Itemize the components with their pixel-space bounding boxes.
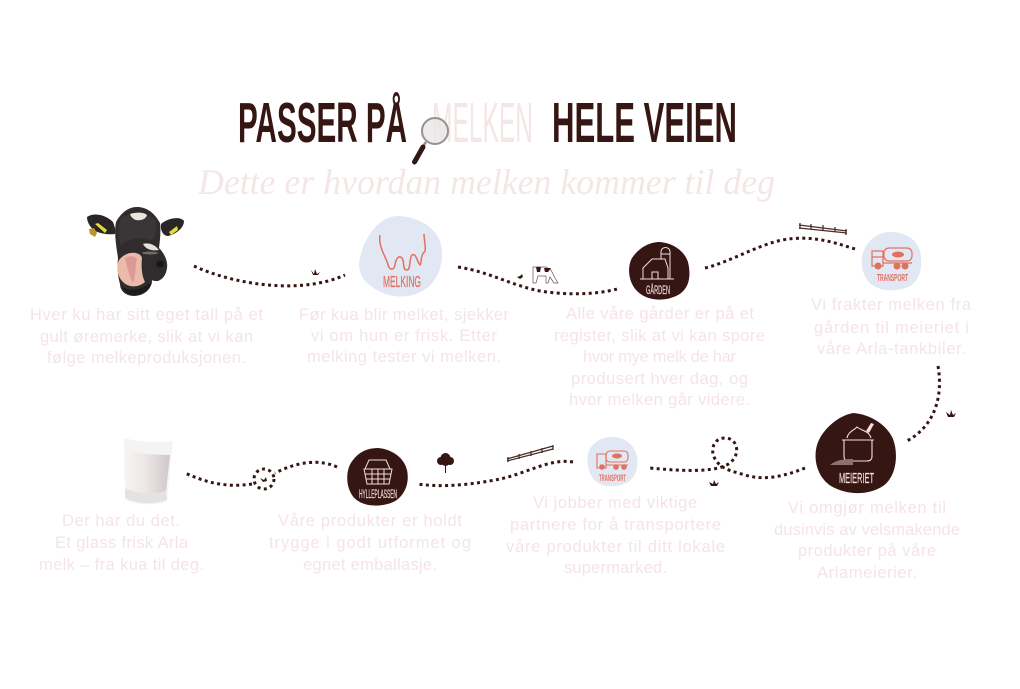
panel: transport icon 2: TRANSPORT [599,473,626,483]
text block: meieriet: dusinvis av velsmakende [774,521,960,539]
arrow: transport to shelf [418,461,573,486]
text block: gården: produsert hver dag, og [571,370,748,388]
text block: glass of milk: Der har du det. [62,512,180,530]
text block: meieriet: Arlameierier. [817,564,917,582]
text block: meieriet: Vi omgjør melken til [788,499,946,517]
text block: gården: hvor melken går videre. [569,391,750,409]
title: HELE VEIEN [552,91,737,155]
text block: transport to stores [506,494,725,577]
text block: gården [554,305,765,409]
text block: transport: Vi frakter melken fra [811,296,972,314]
text block: melking: melking tester vi melken. [307,348,501,366]
icon: shopping basket [364,460,392,484]
icon: yoghurt pot [842,427,874,461]
text block: hylleplassen: egnet emballasje. [303,556,437,574]
text block: hylleplassen: Våre produkter er holdt [278,512,462,530]
text block: gården: hvor mye melk de har [583,348,736,366]
icon: udder [380,234,425,270]
text block: transport to stores: våre produkter til ditt lokale [506,538,725,556]
panel: gården icon [629,242,689,300]
text block: meieriet [774,499,960,582]
panel: transport icon 2 [587,437,637,486]
panel: transport icon [862,232,921,290]
text block: transport to stores: partnere for å transportere [510,516,721,534]
arrow: farm to transport [705,238,855,268]
photo: glass of milk [124,438,173,504]
icon: grass tuft [260,477,267,482]
arrow: milking to farm [458,267,617,294]
icon: cow grazing [533,267,558,283]
text block: cow: Hver ku har sitt eget tall på et [30,306,263,324]
subtitle: Dette er hvordan melken kommer til deg [197,162,775,202]
text block: glass of milk [39,512,204,574]
text block: cow: gult øremerke, slik at vi kan [40,328,253,346]
text block: melking: vi om hun er frisk. Etter [311,327,498,345]
panel: hylleplassen icon [347,448,408,506]
text block: hylleplassen [269,512,471,574]
text block: glass of milk: melk – fra kua til deg. [39,556,204,574]
arrow: shelf to glass with loop [185,462,337,489]
text block: glass of milk: Et glass frisk Arla [55,534,189,552]
icon: tanker truck [872,248,912,266]
icon: barn and silo [640,248,674,279]
text block: transport to stores: supermarked. [564,559,667,577]
icon: fence [799,223,847,235]
arrow: cow to milking [194,266,345,286]
text block: transport to stores: Vi jobber med viktige [533,494,697,512]
text block: melking: Før kua blir melket, sjekker [299,306,510,324]
photo: cow head [87,207,184,296]
title: PASSER PÅ [238,91,407,155]
panel: gården icon: GÅRDEN [646,282,670,297]
icon: grass tuft [709,480,719,486]
title [238,91,737,155]
text block: transport: gården til meieriet i [814,319,969,337]
icon: grass tuft [517,274,523,279]
title: MELKEN [432,91,533,155]
icon: fence [507,445,553,462]
icon: magnifying glass [414,118,448,162]
arrow: dairy to transport with loop [650,438,805,478]
panel: melking icon [359,216,442,297]
text block: meieriet: produkter på våre [798,542,936,560]
icon: tree [437,453,454,473]
panel: hylleplassen icon: HYLLEPLASSEN [359,487,397,501]
text block: transport: våre Arla-tankbiler. [817,340,966,358]
label: MELKING [383,274,421,291]
text block: cow [30,306,263,367]
text block: hylleplassen: trygge i godt utformet og [269,534,471,552]
icon: grass tuft [311,269,320,275]
arrow: transport to dairy [907,366,939,441]
text block: melking [299,306,510,366]
icon: grass tuft [946,410,956,417]
panel: meieriet icon: MEIERIET [839,470,874,487]
panel: meieriet icon [816,413,896,493]
text block: transport [811,296,972,358]
icon: tanker truck [597,451,628,468]
panel: transport icon: TRANSPORT [877,273,908,284]
text block: cow: følge melkeproduksjonen. [47,349,246,367]
text block: gården: register, slik at vi kan spore [554,327,765,345]
text block: gården: Alle våre gårder er på et [566,305,754,323]
